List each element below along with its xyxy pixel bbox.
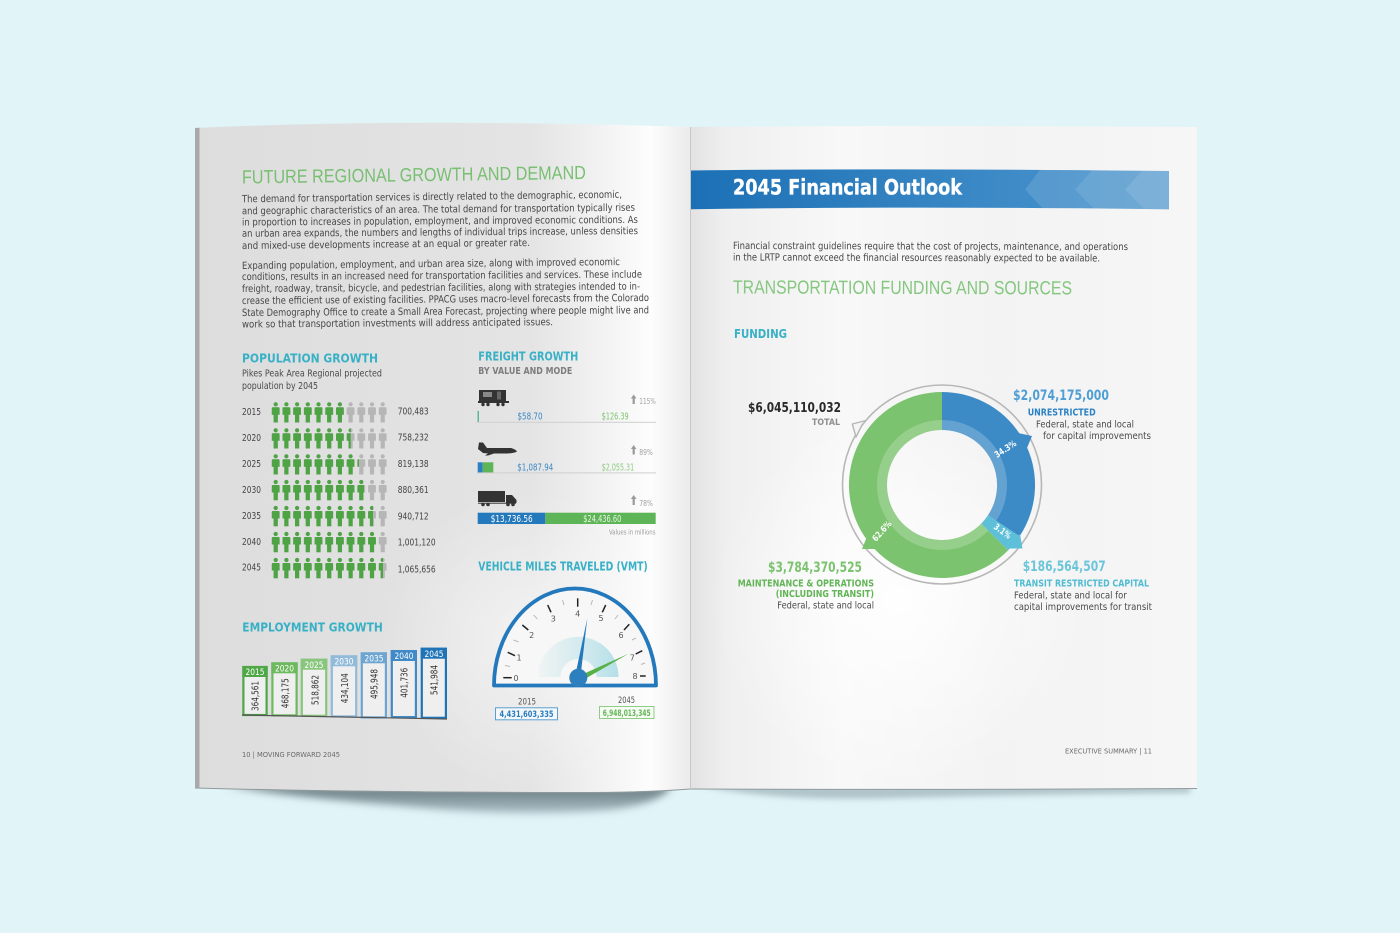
text block: financial constraint <box>733 241 1128 264</box>
text block: paragraph 1: in proportion to increases in population, employment, and improved economic conditions. As <box>242 215 638 228</box>
label: transit restricted capital: capital improvements for transit <box>1014 602 1152 613</box>
label: maintenance and operations: MAINTENANCE & OPERATIONS <box>738 578 874 590</box>
icon: train car <box>478 390 509 406</box>
text block: paragraph 1: an urban area expands, the numbers and lengths of individual trips increase, unless densities <box>242 226 638 240</box>
label: unrestricted <box>1013 388 1151 442</box>
text block: paragraph 1 <box>241 190 638 252</box>
bar 2015: 2015 <box>246 667 265 678</box>
gauge: 8 <box>632 672 638 681</box>
gauge: 4 <box>575 609 580 618</box>
bar 2015 <box>242 666 268 715</box>
bar 2025: 2025 <box>304 660 324 671</box>
label: total: TOTAL <box>812 418 840 428</box>
text block: financial constraint: Financial constraint guidelines require that the cost of projects, maintenance, and operations <box>733 241 1128 253</box>
bar 2040 <box>391 650 417 717</box>
row 2045: 1,065,656 <box>398 564 436 575</box>
book shadow <box>225 786 1190 813</box>
bar 2030: 2030 <box>334 656 354 667</box>
label: 89 percent: 89% <box>639 448 653 457</box>
text block: paragraph 2: crease the efficient use of existing facilities. PPACG uses macro-level forecasts from the Colorado <box>242 293 649 307</box>
bar 2045 <box>421 648 447 718</box>
subtitle: population by 2045 <box>242 381 318 392</box>
panel: employment growth <box>242 620 447 719</box>
heading: employment growth: EMPLOYMENT GROWTH <box>242 620 383 635</box>
percent: 62.6: 62.6% <box>871 519 894 544</box>
rail values: $126.39 <box>602 412 629 422</box>
donut chart <box>842 385 1042 584</box>
label: unrestricted: UNRESTRICTED <box>1028 408 1096 418</box>
banner: 2045 financial outlook: 2045 Financial Outlook <box>733 176 963 200</box>
gauge: 6 <box>618 631 624 640</box>
panel: vehicle miles traveled <box>478 559 656 720</box>
bar 2025: 518,862 <box>310 675 322 705</box>
bar 2025 <box>301 659 327 716</box>
gauge <box>494 588 656 687</box>
label: unrestricted: for capital improvements <box>1043 431 1151 442</box>
bar 2045: 541,984 <box>430 665 440 695</box>
row 2020: 2020 <box>242 433 261 444</box>
outer ring <box>842 385 1042 584</box>
heading: transportation funding: TRANSPORTATION FUNDING AND SOURCES <box>733 278 1072 299</box>
bar 2040: 2040 <box>394 651 414 662</box>
label: unrestricted: Federal, state and local <box>1036 420 1134 430</box>
row 2025 <box>242 454 429 474</box>
label: 2045 value <box>600 696 654 719</box>
row 2040: 2040 <box>242 537 261 548</box>
label: maintenance and operations: (INCLUDING TRANSIT) <box>776 589 874 600</box>
gauge: 5 <box>598 614 604 623</box>
row 2035: 2035 <box>242 511 261 522</box>
truck values bar: $24,436.60 <box>583 514 621 525</box>
row 2035: 940,712 <box>398 512 429 523</box>
label: 2015 value: 4,431,603,335 <box>500 710 554 720</box>
row 2040: 1,001,120 <box>398 538 436 549</box>
row 2020 <box>242 428 429 448</box>
segment: maintenance and operations <box>849 392 1008 578</box>
gauge: 3 <box>551 614 556 623</box>
row 2035 <box>242 506 429 526</box>
row 2030: 2030 <box>242 485 261 496</box>
row 2015: 2015 <box>242 407 261 418</box>
text block: paragraph 2: Expanding population, employment, and urban area size, along with improved economic <box>242 257 620 272</box>
segment: unrestricted <box>942 392 1035 536</box>
heading: future regional growth: FUTURE REGIONAL GROWTH AND DEMAND <box>242 163 586 188</box>
note: values in millions: Values in millions <box>609 528 656 536</box>
gauge: 0 <box>513 674 519 683</box>
icon: up arrow 89 percent <box>631 445 636 454</box>
label: 2015 value: 2015 <box>518 698 536 708</box>
pointer: unrestricted <box>1018 433 1032 448</box>
percent: 3.1: 3.1% <box>991 522 1013 542</box>
row 2025: 819,138 <box>398 459 429 470</box>
text block: paragraph 2: conditions, results in an increased need for transportation facilities and services. These include <box>242 270 642 283</box>
callout notch: total <box>852 420 866 437</box>
panel: population growth <box>242 350 436 578</box>
heading: vehicle miles traveled: VEHICLE MILES TRAVELED (VMT) <box>478 559 648 574</box>
label: maintenance and operations: $3,784,370,525 <box>768 560 862 576</box>
row 2030 <box>242 480 429 500</box>
bar 2020 <box>271 662 298 715</box>
segment: transit restricted <box>981 515 1020 550</box>
bar 2030 <box>331 655 357 716</box>
icon: up arrow 115 percent <box>631 394 636 404</box>
text block: paragraph 1: The demand for transportation services is directly related to the demographic, economic, <box>241 190 622 205</box>
subtitle: Pikes Peak Area Regional projected <box>242 369 382 380</box>
label: 2045 value: 2045 <box>618 696 635 706</box>
bar 2020: 468,175 <box>280 678 292 708</box>
panel: left page <box>195 123 690 793</box>
text block: paragraph 2: freight, roadway, transit, bicycle, and pedestrian facilities, along with strategies intended to in- <box>242 282 640 295</box>
panel: freight growth <box>477 349 656 536</box>
label: transit restricted capital: $186,564,507 <box>1023 559 1106 575</box>
label: 78 percent: 78% <box>639 499 653 508</box>
text block: financial constraint: in the LRTP cannot exceed the financial resources reasonably expected to be available. <box>733 253 1100 264</box>
bar 2035 <box>361 652 387 717</box>
banner: 2045 financial outlook <box>691 169 1169 209</box>
bar 2020: 2020 <box>275 663 294 674</box>
pointer: transit <box>1007 534 1022 548</box>
row 2030: 880,361 <box>398 485 429 496</box>
text block: paragraph 1: and geographic characteristics of an area. The total demand for transportation typically rises <box>242 203 635 217</box>
bar 2035: 2035 <box>364 653 384 664</box>
row 2025: 2025 <box>242 459 261 470</box>
label: total: $6,045,110,032 <box>748 400 841 416</box>
footer right: EXECUTIVE SUMMARY | 11 <box>1065 748 1152 756</box>
subtitle <box>242 369 382 392</box>
text block: paragraph 2: State Demography Office to create a Small Area Forecast, projecting where people might live and <box>242 305 649 319</box>
icon: up arrow 78 percent <box>631 495 636 505</box>
row 2015 <box>242 402 429 422</box>
gauge: 1 <box>516 653 522 662</box>
text block: paragraph 2 <box>242 257 649 330</box>
bar 2045: 2045 <box>424 649 444 660</box>
rail values <box>477 411 656 423</box>
heading: freight growth: FREIGHT GROWTH <box>478 349 578 364</box>
air values <box>477 462 656 473</box>
row 2015: 700,483 <box>398 406 429 418</box>
gauge: 7 <box>630 653 635 662</box>
label: maintenance and operations <box>738 560 874 612</box>
truck values bar <box>478 513 656 525</box>
icon: truck <box>478 491 516 506</box>
label: transit restricted capital <box>1014 559 1152 613</box>
gauge: 2 <box>529 631 534 640</box>
air values: $2,055.31 <box>602 462 634 473</box>
heading: funding: FUNDING <box>734 326 787 341</box>
bar 2030: 434,104 <box>340 673 351 703</box>
row 2040 <box>242 532 436 552</box>
text block: paragraph 1: and mixed-use developments increase at an equal or greater rate. <box>242 238 530 252</box>
icon: airplane <box>478 442 517 456</box>
row 2045 <box>242 558 436 578</box>
row 2020: 758,232 <box>398 432 429 444</box>
inner highlight ring <box>882 425 1002 545</box>
bar 2035: 495,948 <box>370 669 380 699</box>
truck values bar: $13,736.56 <box>491 514 533 525</box>
label: transit restricted capital: Federal, state and local for <box>1014 590 1127 602</box>
text block: paragraph 2: work so that transportation investments will address anticipated issues. <box>242 317 553 330</box>
label: total <box>748 400 841 428</box>
label: 115 percent: 115% <box>639 397 656 406</box>
subheading: by value and mode: BY VALUE AND MODE <box>478 366 572 377</box>
bar 2040: 401,736 <box>400 668 410 698</box>
footer left: 10 | MOVING FORWARD 2045 <box>242 750 340 759</box>
pointer: maintenance <box>862 534 878 549</box>
label: transit restricted capital: TRANSIT RESTRICTED CAPITAL <box>1014 578 1149 590</box>
label: maintenance and operations: Federal, state and local <box>777 600 874 612</box>
label: 2015 value <box>496 698 558 720</box>
label: unrestricted: $2,074,175,000 <box>1013 388 1109 404</box>
air values: $1,087.94 <box>517 462 553 473</box>
rail values: $58.70 <box>518 412 542 422</box>
panel: right page <box>690 126 1197 789</box>
heading: population growth: POPULATION GROWTH <box>242 350 378 366</box>
bar 2015: 364,561 <box>250 681 262 711</box>
row 2045: 2045 <box>242 563 261 574</box>
label: 2045 value: 6,948,013,345 <box>603 709 651 719</box>
percent: 34.3: 34.3% <box>993 439 1019 461</box>
